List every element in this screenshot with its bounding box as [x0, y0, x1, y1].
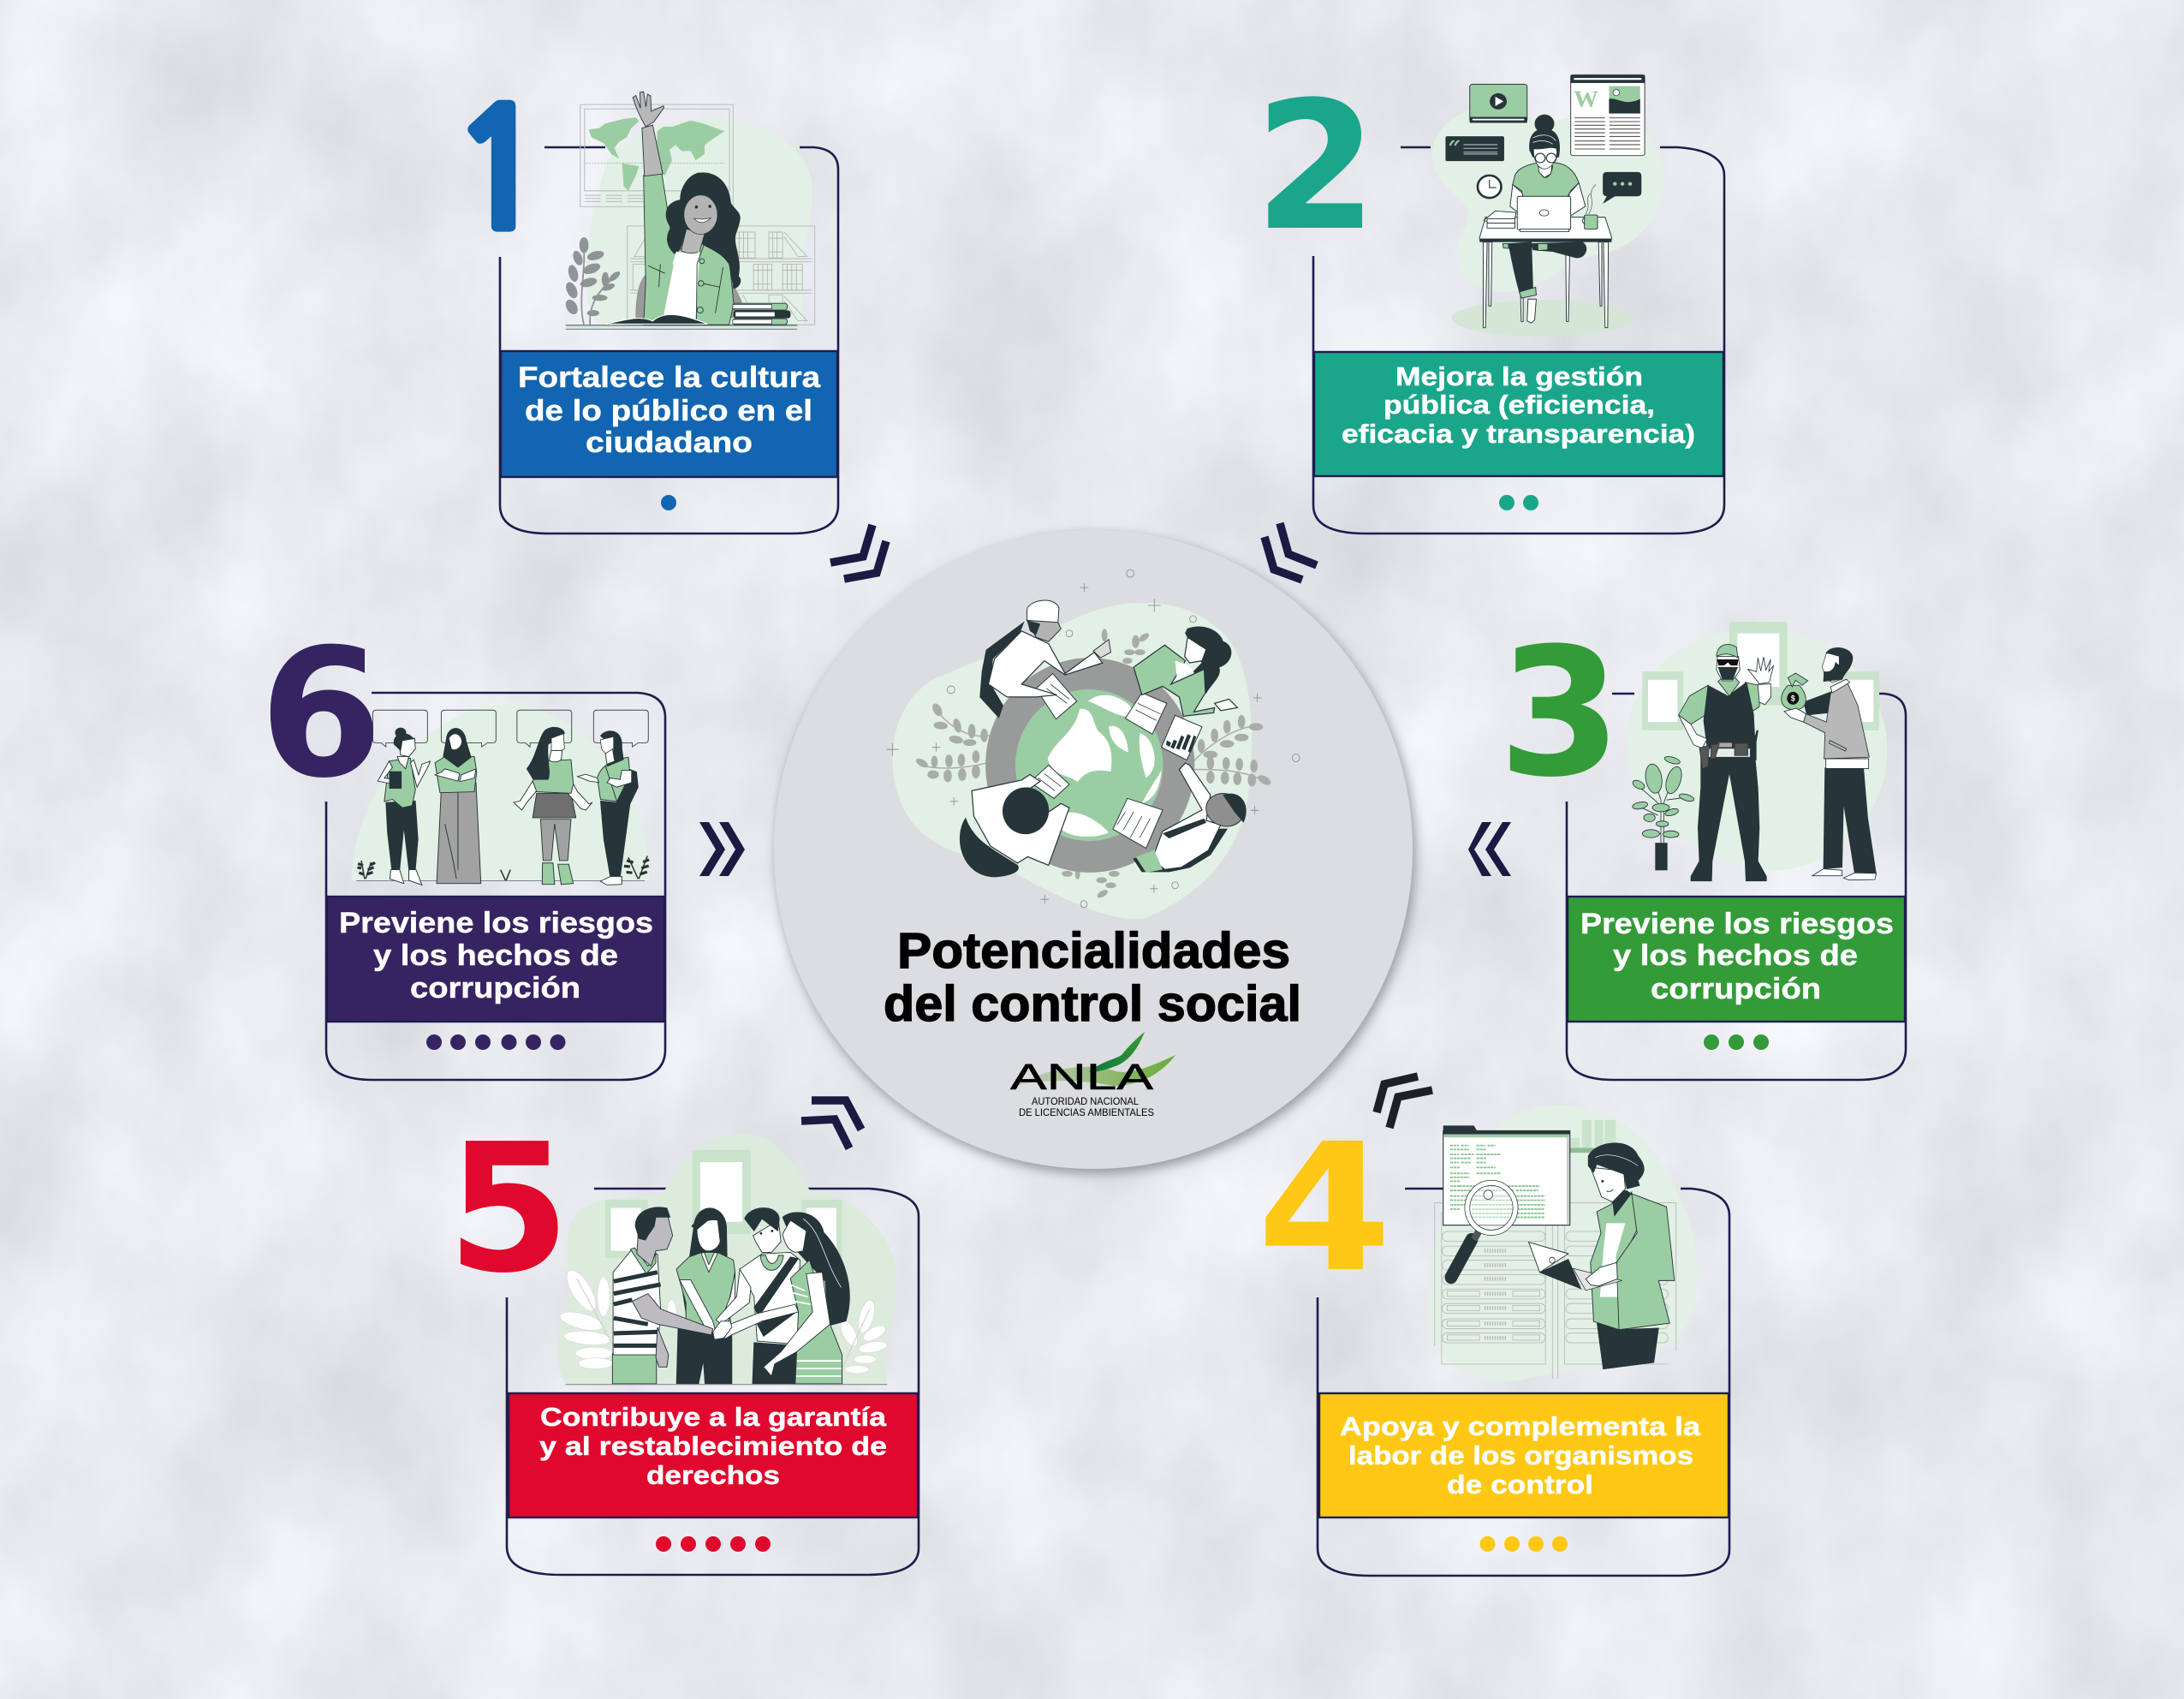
card 6 band — [327, 897, 664, 1022]
caption 6: y los hechos de — [373, 939, 618, 972]
page dots 5 — [656, 1536, 771, 1552]
person top right — [1134, 627, 1237, 716]
caption 2: Mejora la gestión — [1395, 361, 1643, 391]
arrow: card 6 to center — [699, 822, 745, 876]
plants — [361, 856, 647, 880]
page dots 2 — [1499, 495, 1538, 510]
person 4 — [783, 1220, 806, 1252]
card 3 — [1498, 610, 1906, 1080]
caption 1: de lo público en el — [525, 395, 812, 427]
illustration 5: team joining hands — [557, 1134, 896, 1385]
caption 1 — [518, 361, 821, 459]
illustration 3: guard refusing a bribe — [1628, 622, 1887, 881]
caption 6: corrupción — [410, 972, 580, 1004]
illustration 1: student raising hand — [563, 92, 815, 329]
caption 3 — [1580, 908, 1894, 1005]
illustration 4: woman reviewing data by servers — [1428, 1106, 1698, 1381]
ANLA logo — [1010, 1032, 1175, 1118]
desk — [1483, 242, 1609, 328]
person top left — [980, 600, 1110, 718]
caption 5: y al restablecimiento de — [539, 1431, 887, 1461]
illustration 3: guard refusing a bribe: $ — [1791, 694, 1795, 703]
person bottom right — [1134, 763, 1247, 873]
card 2 outline — [1313, 147, 1724, 534]
title: del control social — [884, 976, 1301, 1032]
person 4 hair — [783, 1213, 849, 1326]
person bottom left — [960, 774, 1069, 877]
hair — [666, 173, 741, 289]
number 4: 4 — [1257, 1106, 1392, 1311]
caption 1: Fortalece la cultura — [518, 361, 821, 394]
magnifier — [1451, 1240, 1472, 1278]
person 3 — [740, 1252, 800, 1344]
caption 3: y los hechos de — [1613, 939, 1858, 972]
woman 1 — [386, 801, 418, 870]
card 5 outline — [507, 1189, 919, 1575]
card 3 band — [1568, 897, 1905, 1022]
caption 4: labor de los organismos — [1348, 1440, 1693, 1470]
caption 4: Apoya y complementa la — [1340, 1411, 1701, 1441]
card 1 — [450, 90, 838, 534]
caption 4 — [1340, 1411, 1701, 1499]
number 2: 2 — [1254, 63, 1378, 270]
title: Potencialidades — [897, 923, 1290, 979]
caption 3: corrupción — [1651, 973, 1821, 1005]
card 4 outline — [1318, 1189, 1729, 1576]
plant — [1632, 755, 1695, 870]
card 6 — [259, 611, 665, 1080]
ANLA logo: AUTORIDAD NACIONAL — [1032, 1097, 1140, 1107]
card 6 outline — [326, 693, 665, 1080]
card 3 outline — [1567, 694, 1906, 1080]
arrow: card 2 to center — [1265, 523, 1317, 580]
person 2 — [689, 1208, 727, 1260]
card 2 band — [1314, 352, 1723, 476]
person 1 — [612, 1351, 657, 1384]
central circle panel — [774, 530, 1413, 1169]
caption 4: de control — [1447, 1469, 1593, 1499]
number 1: 1 — [450, 90, 550, 253]
page dots 1 — [661, 495, 676, 510]
man with money bag — [1824, 768, 1877, 875]
caption 3: Previene los riesgos — [1580, 908, 1894, 940]
caption 5: Contribuye a la garantía — [540, 1402, 887, 1432]
caption 6: Previene los riesgos — [339, 907, 653, 939]
arrow: card 5 to center — [801, 1100, 861, 1148]
caption 5 — [539, 1402, 887, 1490]
caption 1: ciudadano — [586, 426, 753, 459]
number 5: 5 — [447, 1106, 570, 1312]
caption 2: eficacia y transparencia) — [1342, 419, 1695, 449]
caption 5: derechos — [646, 1460, 780, 1490]
card 4 band — [1319, 1393, 1729, 1517]
woman 2 — [437, 783, 481, 884]
number 3: 3 — [1498, 610, 1622, 816]
arrow: card 3 to center — [1468, 822, 1511, 876]
illustration 6: four people talking — [352, 704, 650, 885]
caption 2: pública (eficiencia, — [1384, 390, 1655, 420]
card 4 — [1257, 1106, 1729, 1576]
arrow: card 1 to center — [830, 525, 886, 579]
ANLA logo: DE LICENCIAS AMBIENTALES — [1019, 1108, 1154, 1118]
arrow: card 4 to center — [1377, 1076, 1432, 1128]
page dots 4 — [1479, 1536, 1568, 1552]
page dots 6 — [426, 1034, 565, 1050]
caption 6 — [339, 907, 653, 1004]
title — [884, 923, 1301, 1032]
open book — [604, 314, 708, 324]
illustration 2: woman at desk with laptop — [1432, 75, 1663, 337]
table papers — [1030, 674, 1202, 849]
card 2 — [1254, 63, 1724, 534]
woman — [1597, 1321, 1658, 1369]
woman 3 — [540, 820, 571, 861]
page dots 3 — [1704, 1034, 1769, 1050]
number 6: 6 — [259, 611, 383, 817]
card 5 band — [509, 1393, 918, 1517]
plus marks and circles — [886, 569, 1300, 908]
central illustration: people around the world table — [886, 569, 1300, 919]
card 5 — [447, 1106, 919, 1575]
ANLA logo: ANLA — [1010, 1057, 1153, 1098]
card 1 outline — [500, 147, 838, 534]
caption 2 — [1342, 361, 1695, 449]
card 1 band — [501, 351, 837, 477]
guard — [1691, 757, 1766, 881]
illustration 2: woman at desk with laptop: W — [1574, 86, 1598, 112]
woman 4 — [617, 766, 638, 804]
